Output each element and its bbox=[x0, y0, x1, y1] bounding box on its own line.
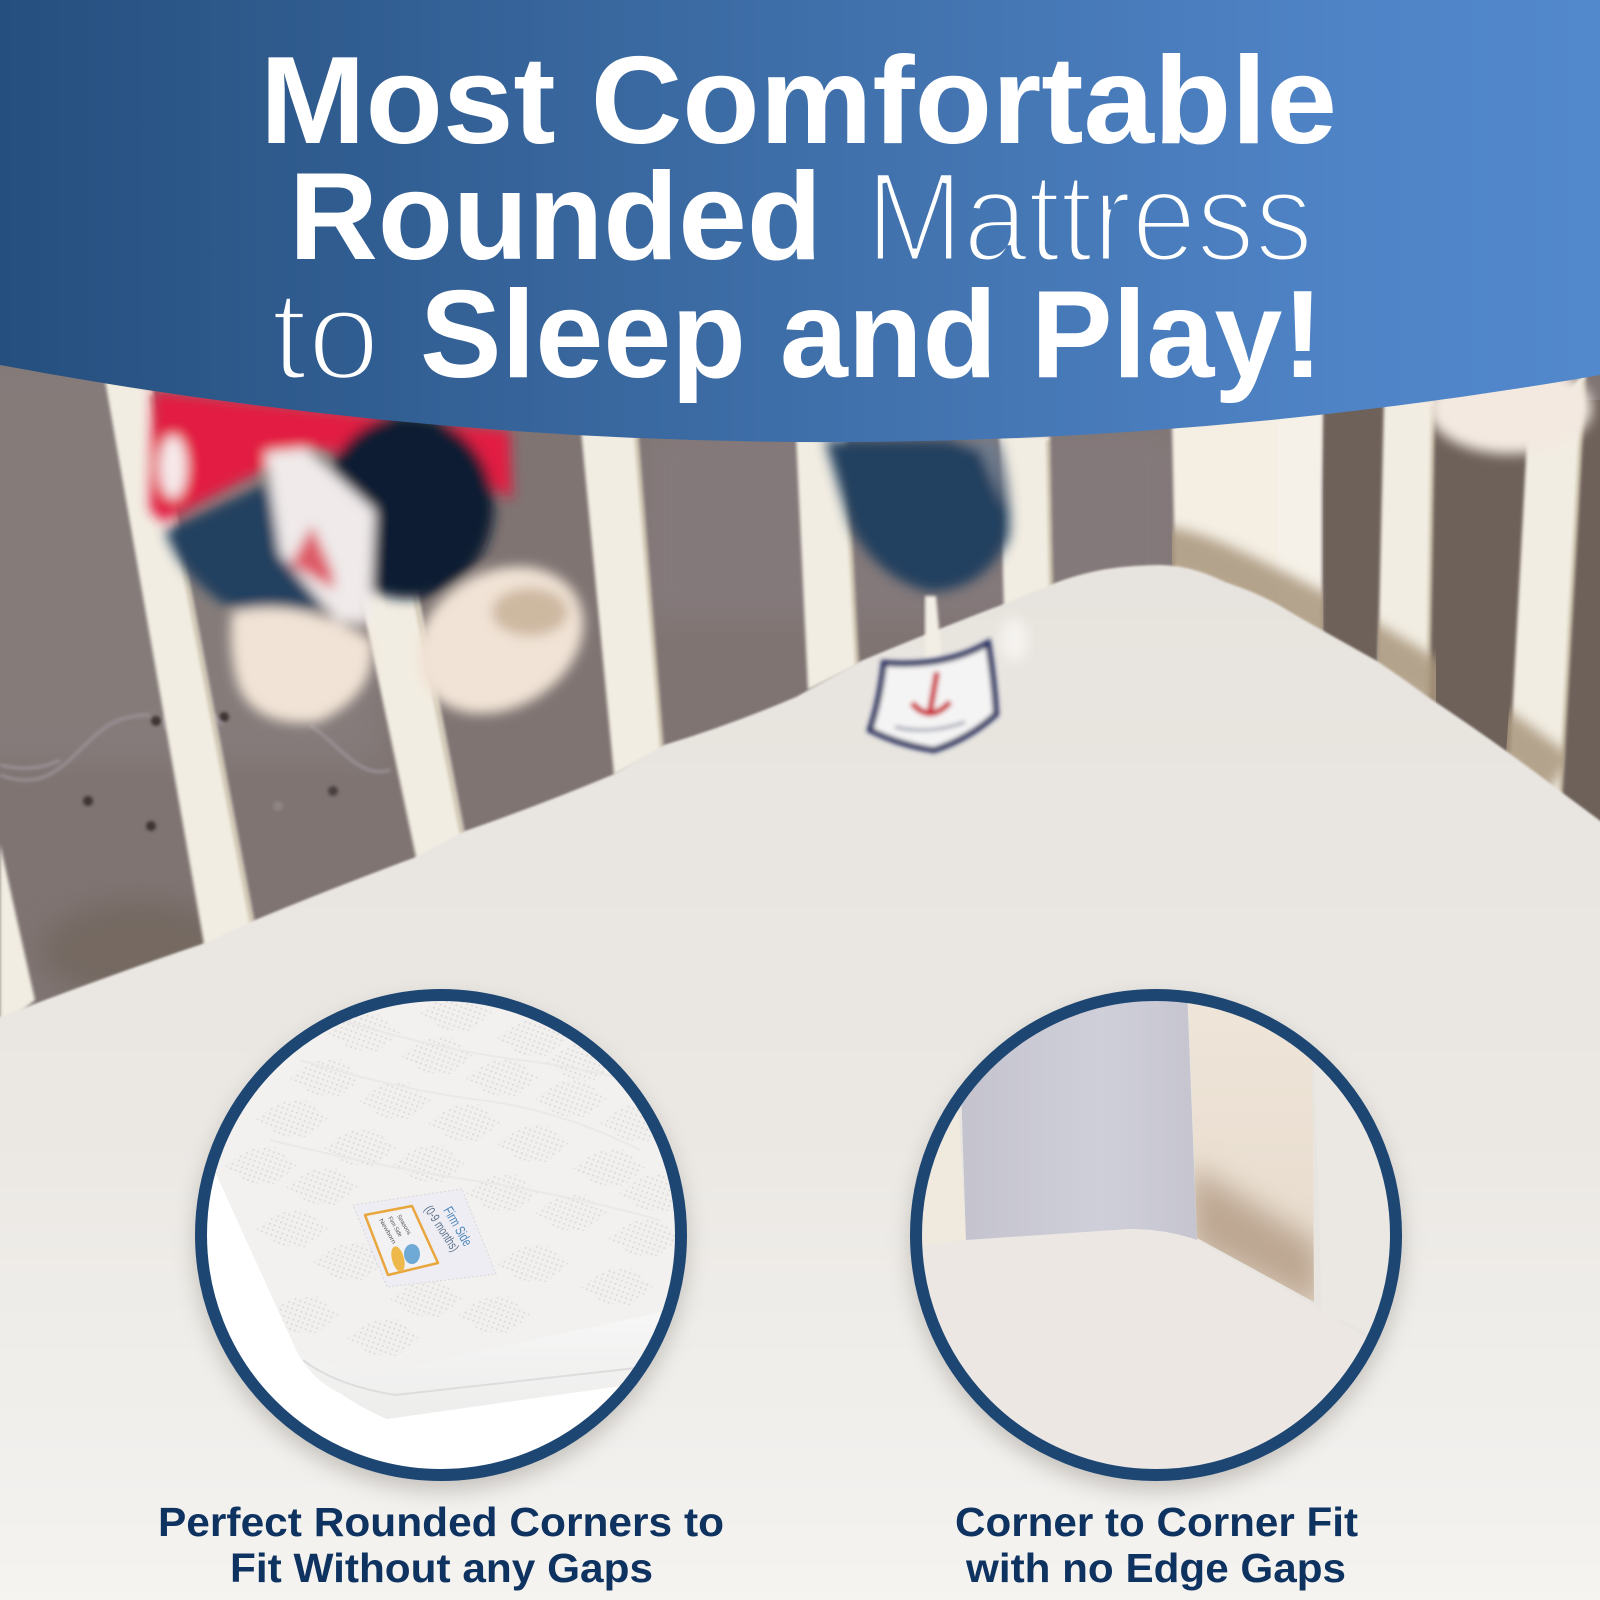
beige post shadow bbox=[1190, 1165, 1320, 1310]
beige corner post bbox=[1188, 990, 1314, 1302]
title line 2 light: Mattress bbox=[866, 146, 1313, 289]
circle shadows bbox=[195, 999, 1402, 1491]
mattress side panel and zipper bbox=[342, 1394, 386, 1418]
toy: left foot bbox=[231, 607, 373, 723]
care label: Firm Side bbox=[440, 1204, 476, 1249]
toy: red hat bbox=[150, 390, 512, 522]
crib slats bbox=[0, 370, 1586, 1030]
circle: rounded corner mattress bbox=[190, 985, 700, 1487]
fabric ripple lines bbox=[312, 1027, 659, 1220]
white mattress surface bbox=[216, 1001, 675, 1413]
caption: corner fit: with no Edge Gaps bbox=[965, 1545, 1346, 1591]
title line 2 bold: Rounded bbox=[289, 148, 822, 286]
wall decoration: wavy line and holes bbox=[0, 705, 390, 831]
mattress with fitted sheet bbox=[0, 565, 1600, 1600]
blurred anchor badge bbox=[870, 643, 996, 750]
caption: rounded corners bbox=[158, 1499, 724, 1591]
title line 1: Most Comfortable bbox=[260, 32, 1337, 170]
toy: tan spot bbox=[492, 588, 568, 636]
toy: right foot bbox=[390, 537, 610, 743]
diamond knit pattern bbox=[225, 994, 691, 1356]
toy: dark head bbox=[322, 415, 494, 599]
care label: Firm Side bbox=[386, 1216, 403, 1239]
title line 3 light: to bbox=[271, 264, 380, 407]
toy: white tag bbox=[265, 448, 375, 625]
crib corner post bbox=[1172, 412, 1323, 640]
toy: red tag mark bbox=[290, 525, 335, 590]
blurred plush toy bbox=[150, 390, 610, 743]
banner: curved blue header bbox=[0, 0, 1600, 442]
left cream post bbox=[905, 1100, 966, 1250]
caption: corner fit: Corner to Corner Fit bbox=[955, 1499, 1358, 1545]
photo: crib background wall bbox=[0, 0, 1600, 1100]
title line 3 bold: Sleep and Play! bbox=[420, 266, 1323, 404]
caption: corner fit bbox=[955, 1499, 1358, 1591]
blurred navy toy leg bbox=[825, 440, 1010, 592]
circle: corner to corner fit bbox=[905, 985, 1410, 1490]
care label: Seasons bbox=[395, 1214, 411, 1236]
care label: (0-9 months) bbox=[421, 1202, 462, 1254]
caption: rounded corners: Perfect Rounded Corners to bbox=[158, 1499, 724, 1545]
post and slat shadow above mattress bbox=[1160, 548, 1560, 775]
mattress corner bbox=[966, 1229, 1196, 1242]
title bbox=[260, 32, 1337, 407]
care label bbox=[353, 1189, 496, 1287]
sheet highlight bbox=[1000, 618, 1028, 662]
right white post bbox=[1312, 990, 1410, 1350]
toy: navy body bbox=[165, 480, 385, 612]
caption: rounded corners: Fit Without any Gaps bbox=[230, 1545, 653, 1591]
blurred toy top right bbox=[1428, 362, 1592, 454]
toy string bbox=[925, 596, 942, 660]
lavender wall bbox=[958, 990, 1197, 1242]
care label: Newborn bbox=[377, 1218, 396, 1245]
